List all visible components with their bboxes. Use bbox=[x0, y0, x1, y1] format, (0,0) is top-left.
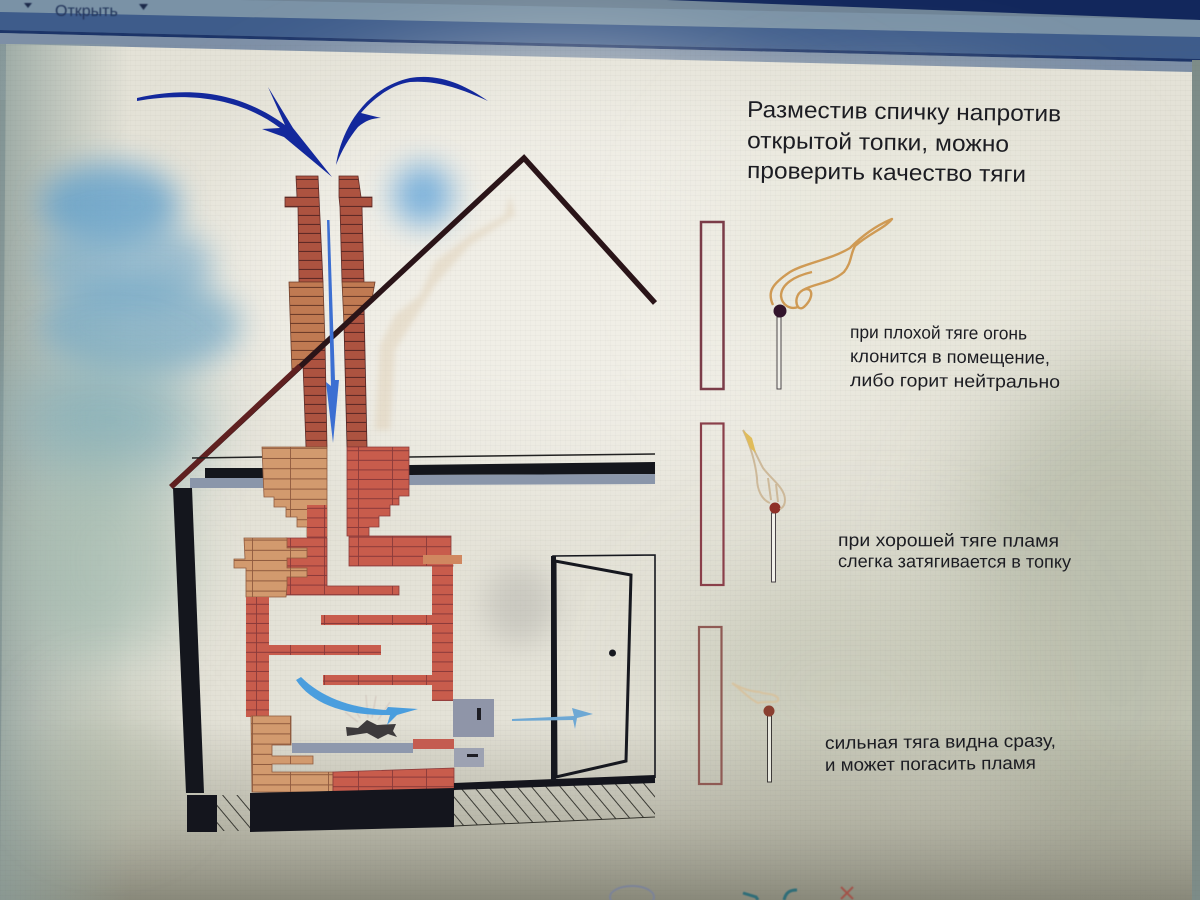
flare right bbox=[347, 447, 409, 536]
caption: bad draught: при плохой тяге огонь bbox=[850, 322, 1027, 344]
firebox opening bbox=[699, 627, 722, 784]
roof line bbox=[171, 158, 655, 487]
fire sparks bbox=[345, 695, 390, 722]
match head bbox=[764, 706, 774, 716]
big arrow: air into chimney right bbox=[336, 77, 488, 165]
attic stain bbox=[375, 195, 515, 430]
draught arrow: to door bbox=[512, 708, 593, 729]
stove top left red bbox=[267, 538, 399, 595]
panel: good draught bbox=[701, 424, 785, 585]
baffle 3 bbox=[268, 645, 381, 655]
match stick bbox=[772, 513, 776, 582]
jutting bricks right bbox=[423, 555, 462, 564]
firebox opening bbox=[701, 222, 724, 389]
chimney right shoulder bbox=[342, 282, 375, 325]
foundation and floor bbox=[187, 775, 655, 832]
caption: good draught: слегка затягивается в топку bbox=[838, 551, 1071, 572]
caption: good draught: при хорошей тяге пламя bbox=[838, 530, 1059, 551]
match head bbox=[770, 502, 780, 514]
flare left bbox=[262, 447, 327, 537]
caption: strong draught: и может погасить пламя bbox=[825, 753, 1036, 775]
firebox door bbox=[453, 699, 494, 737]
stove top left tan bbox=[234, 538, 307, 597]
flame faint bbox=[732, 683, 778, 703]
stove top right bbox=[349, 536, 453, 566]
draught arrow: in firebox bbox=[296, 677, 418, 725]
window chrome: toolbar bands bbox=[0, 0, 1200, 100]
bottom red bricks bbox=[333, 768, 454, 792]
door bbox=[551, 555, 655, 781]
arrow: down the flue bbox=[326, 220, 339, 443]
caption: strong draught: сильная тяга видна сразу, bbox=[825, 731, 1056, 753]
left outer wall bbox=[173, 488, 204, 793]
flame tip bbox=[743, 430, 756, 453]
right wall bbox=[432, 564, 453, 701]
chimney right wall upper bbox=[339, 176, 372, 282]
heading bbox=[747, 96, 1061, 187]
caption: good draught bbox=[838, 530, 1071, 572]
flame bbox=[771, 219, 892, 308]
big arrow: air into chimney left bbox=[137, 87, 332, 177]
caption: bad draught bbox=[850, 322, 1060, 392]
grate red bbox=[413, 739, 454, 749]
door knob bbox=[609, 650, 616, 656]
heading: Разместив спичку напротив bbox=[747, 96, 1061, 126]
match stick bbox=[768, 716, 772, 782]
match stick bbox=[777, 317, 781, 389]
stove brickwork bbox=[234, 447, 462, 792]
lower left tan bricks bbox=[251, 716, 333, 792]
baffle 4 bbox=[323, 675, 433, 685]
bottom toolbar icons bbox=[610, 886, 853, 900]
panel: strong draught bbox=[699, 627, 778, 784]
caption: bad draught: клонится в помещение, bbox=[850, 346, 1050, 368]
chimney left lower bbox=[303, 343, 327, 447]
flame bbox=[743, 430, 785, 509]
left wall bbox=[246, 597, 269, 717]
baffle 2 bbox=[321, 615, 433, 625]
chimney left wall upper bbox=[285, 176, 323, 282]
chimney left shoulder bbox=[289, 282, 325, 374]
heading: открытой топки, можно bbox=[747, 127, 1009, 157]
chimney stack bbox=[285, 176, 375, 447]
chimney right lower bbox=[344, 306, 367, 447]
flue wall left bbox=[307, 505, 327, 545]
caption: bad draught: либо горит нейтрально bbox=[850, 370, 1060, 392]
grate bbox=[292, 743, 413, 753]
panel: bad draught bbox=[701, 219, 892, 389]
log bbox=[346, 720, 397, 739]
ash door bbox=[454, 748, 484, 767]
caption: strong draught bbox=[825, 731, 1056, 775]
toolbar label: open: Открыть bbox=[55, 3, 118, 20]
ceiling beams bbox=[190, 454, 655, 488]
heading: проверить качество тяги bbox=[747, 157, 1026, 187]
firebox opening bbox=[701, 424, 724, 585]
match head bbox=[774, 304, 786, 318]
toolbar carets bbox=[24, 3, 148, 10]
watercolor sky clouds behind chimney bbox=[15, 163, 556, 830]
